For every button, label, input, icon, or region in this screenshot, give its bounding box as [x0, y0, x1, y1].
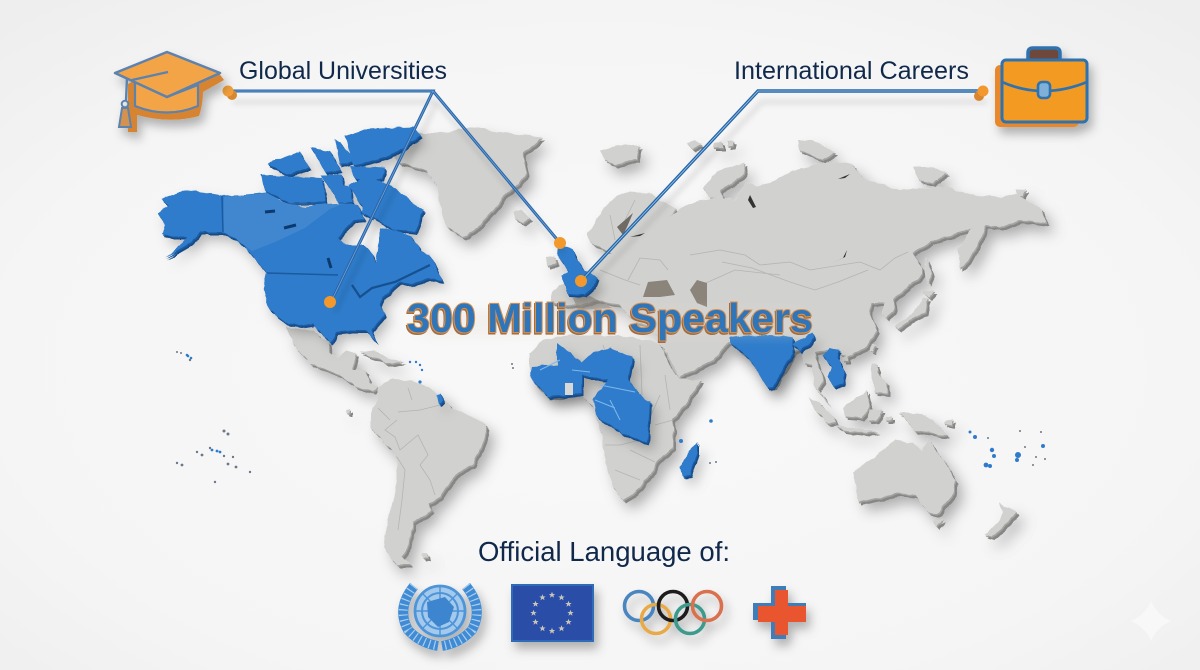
icon: Olympic rings — [624, 592, 722, 634]
icon: European Union flag — [512, 585, 593, 641]
Greenland — [393, 127, 543, 237]
Bangladesh — [793, 333, 815, 351]
Tasmania — [932, 520, 942, 527]
Southeast Asian islands — [808, 362, 892, 433]
dark lakes and inland seas — [573, 174, 850, 310]
Falkland and Galapagos islands — [345, 410, 429, 558]
blue: France, UK, Madagascar, India and other English speaking countries — [158, 127, 845, 476]
Africa — [530, 335, 700, 500]
Wrangel island — [1016, 189, 1025, 195]
France — [561, 266, 597, 295]
Australia — [852, 438, 955, 513]
label: Global Universities: Global Universities — [239, 57, 447, 85]
holes: Ghana — [565, 383, 573, 395]
India — [730, 335, 793, 388]
UK — [557, 246, 582, 272]
Eurasia — [550, 162, 1047, 405]
heading: Official Language of: Official Language of: — [478, 536, 730, 567]
icon: briefcase — [995, 48, 1087, 127]
Novaya Zemlya — [702, 162, 745, 199]
Arctic islands — [687, 140, 733, 148]
New Siberian Islands — [913, 167, 948, 183]
icon: United Nations emblem — [403, 586, 477, 646]
watermark sparkle — [1131, 601, 1171, 641]
grey landmasses — [286, 127, 1047, 565]
Mexico and Central America — [286, 326, 378, 391]
North America borders and lakes — [222, 196, 635, 420]
title: 300 Million Speakers: 300 Million Speakers — [407, 295, 813, 341]
icon: red cross — [753, 586, 806, 639]
Pacific and Caribbean island dots — [176, 351, 1046, 483]
French Guiana — [437, 394, 443, 404]
connector end dots — [222, 86, 988, 308]
Sakhalin, Japan, Taiwan, Hainan — [842, 257, 935, 361]
New Zealand — [985, 502, 1017, 537]
world map — [158, 127, 1047, 565]
Vietnam, Laos, Cambodia — [822, 348, 845, 387]
New Guinea — [898, 413, 953, 435]
Canada Arctic islands — [345, 127, 421, 165]
connector: Global Universities — [229, 91, 564, 312]
Ireland — [547, 256, 556, 265]
South America — [370, 380, 487, 565]
Svalbard — [600, 145, 640, 165]
country borders — [378, 200, 908, 530]
icon: graduation cap — [115, 52, 224, 132]
Severnaya Zemlya — [798, 140, 835, 160]
Canadian sheen — [223, 193, 345, 251]
North America mainland — [158, 190, 442, 343]
label: International Careers: International Careers — [734, 57, 969, 85]
West and Central Africa — [530, 343, 650, 442]
frosted band behind title — [420, 310, 800, 336]
Madagascar — [680, 442, 697, 476]
connector: International Careers — [581, 91, 987, 291]
Iceland — [513, 210, 530, 223]
Cuba — [360, 350, 403, 362]
